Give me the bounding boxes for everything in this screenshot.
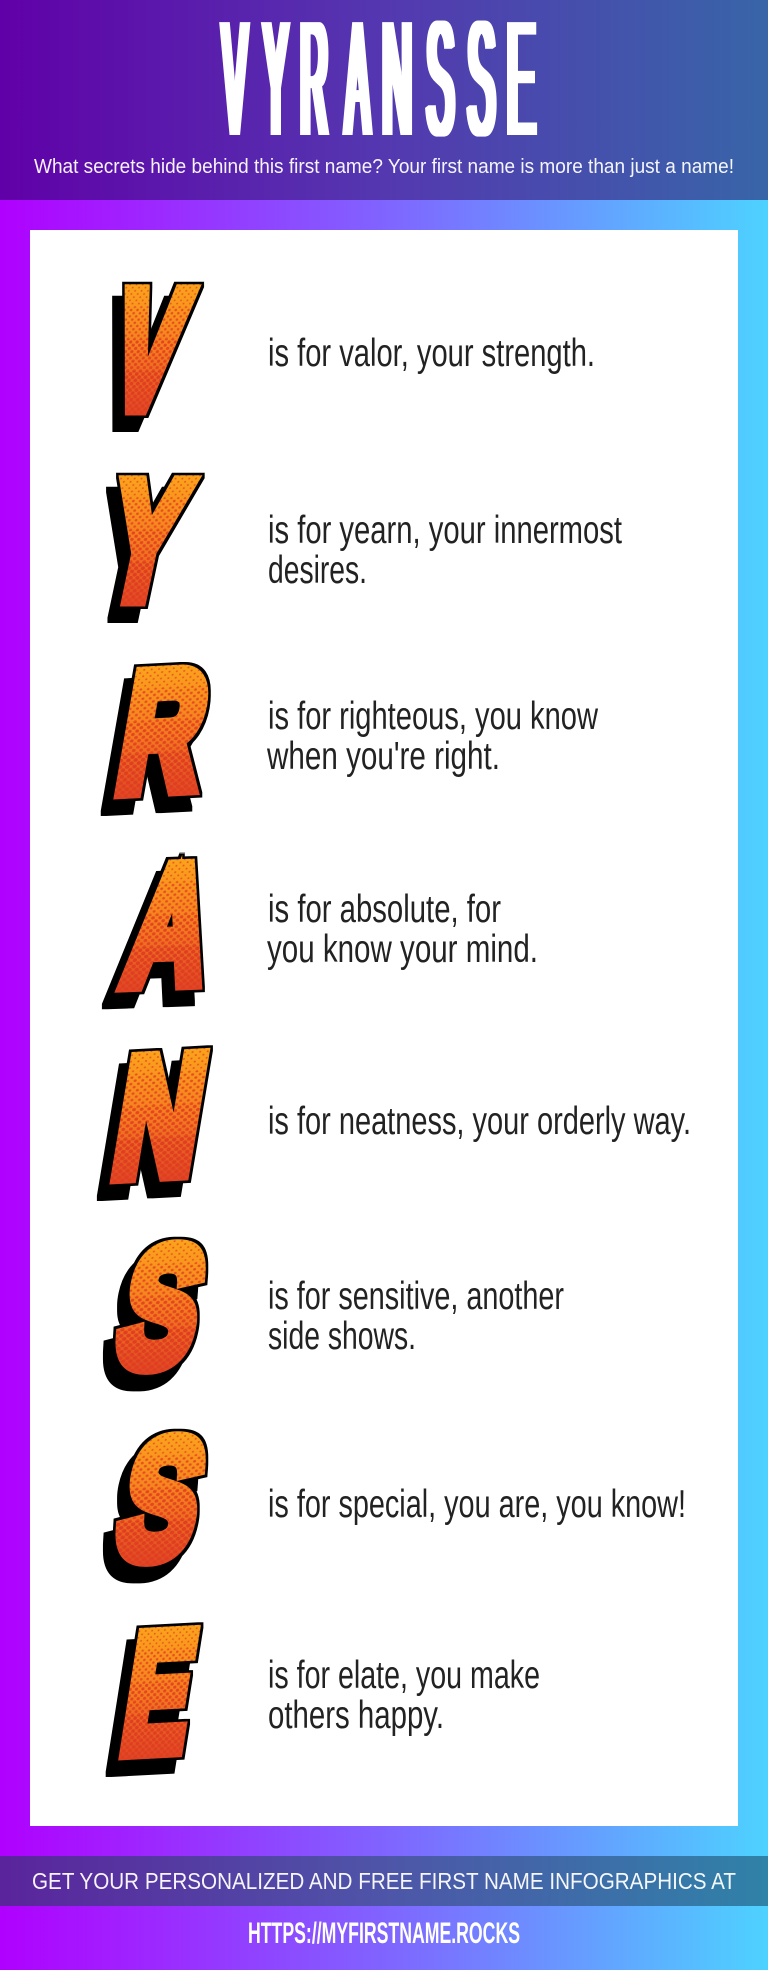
text S: is for sensitive, another [268,1275,564,1318]
row: S second [104,1404,686,1594]
header band [0,0,768,200]
text S: side shows. [268,1315,416,1358]
row: N [103,1020,691,1212]
comic letter E: E [112,1598,206,1788]
text Y: desires. [268,549,367,592]
footer url: HTTPS://MYFIRSTNAME.ROCKS [248,1917,520,1950]
comic letter S second: S [104,1404,219,1594]
title [222,0,535,171]
text Y: is for yearn, your innermost [268,509,622,552]
text R: when you're right. [266,735,500,778]
text A: is for absolute, for [268,888,501,931]
text V: is for valor, your strength. [268,332,595,375]
comic letter Y: Y [92,448,201,633]
text E: others happy. [268,1694,444,1737]
text E: is for elate, you make [268,1654,540,1697]
comic letter V: V [97,258,201,443]
subtitle: What secrets hide behind this first name? Your first name is more than just a name! [34,156,734,178]
comic letter R: R [107,636,220,827]
row: Y [92,448,622,633]
row: E [112,1598,540,1788]
row: A [115,831,538,1020]
text A: you know your mind. [267,928,538,971]
comic letter S: S [104,1212,219,1402]
comic letter A: A [115,831,225,1020]
white panel [30,230,738,1826]
row: V [97,258,595,443]
comic letter N: N [103,1020,217,1212]
footer band [0,1856,768,1906]
row: S [104,1212,564,1402]
text R: is for righteous, you know [268,695,599,738]
row: R [107,636,599,827]
